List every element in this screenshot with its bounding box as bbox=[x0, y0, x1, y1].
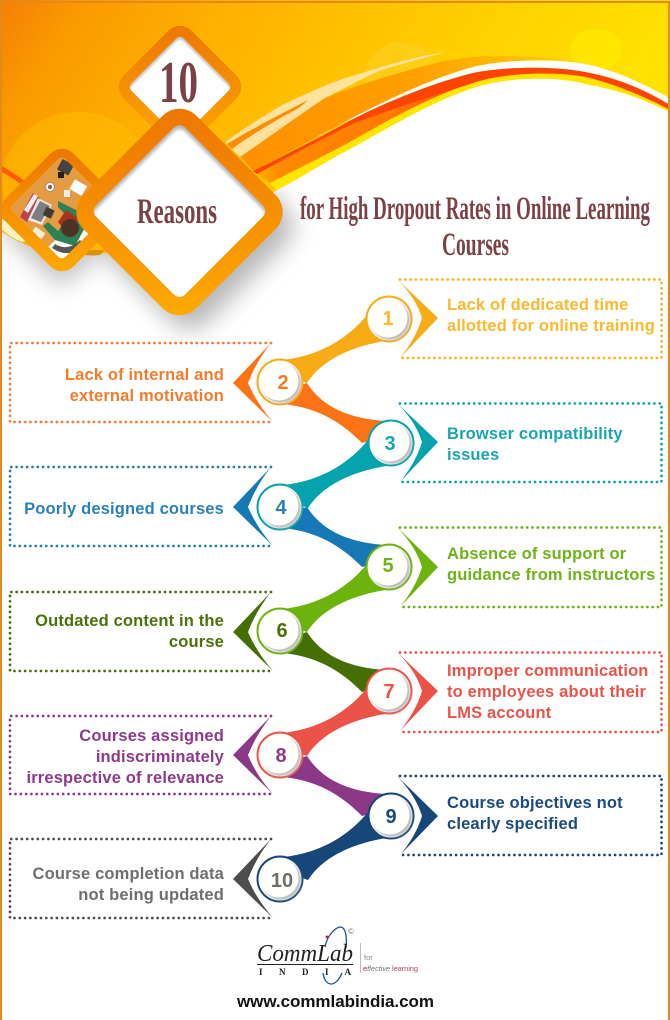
logo: CommLab India: © bbox=[348, 927, 354, 936]
step 8 panel bbox=[10, 716, 273, 794]
number circle 2 bbox=[258, 360, 302, 404]
header background with swoosh bbox=[0, 0, 670, 256]
step 10 panel bbox=[10, 839, 273, 918]
white stripe bbox=[312, 60, 670, 140]
step 3 panel bbox=[397, 403, 662, 482]
number circle 10 bbox=[258, 856, 302, 902]
step 6 panel: course bbox=[169, 633, 224, 651]
yellow strip bbox=[270, 74, 670, 190]
number circle 1: 1 bbox=[382, 308, 394, 330]
number circle 4 bbox=[258, 484, 302, 530]
number circle 3 bbox=[368, 420, 414, 466]
orange band above white stripe bbox=[240, 56, 580, 171]
step 1 panel: Lack of dedicated time bbox=[447, 296, 628, 314]
diamond: desk illustration bbox=[0, 148, 99, 272]
title bbox=[300, 191, 650, 263]
number: 10 bbox=[159, 49, 198, 115]
step 4 panel: Poorly designed courses bbox=[24, 500, 224, 518]
step 2 panel: Lack of internal and bbox=[65, 366, 224, 384]
number circle 2: 2 bbox=[277, 372, 289, 394]
number circle 6: 6 bbox=[276, 620, 288, 642]
number circle 6 bbox=[258, 608, 302, 654]
number circle 7 bbox=[366, 668, 412, 714]
number circle 10: 10 bbox=[271, 870, 293, 892]
step 1 panel: allotted for online training bbox=[447, 317, 655, 335]
step 6 panel: Outdated content in the bbox=[35, 612, 224, 630]
step 7 panel: LMS account bbox=[447, 704, 552, 722]
desk items bbox=[57, 159, 74, 176]
shadow below header diamonds bbox=[0, 113, 303, 339]
step 3 panel: issues bbox=[447, 446, 499, 464]
logo: CommLab India: CommLab bbox=[257, 941, 353, 967]
logo: CommLab India bbox=[257, 927, 418, 984]
step 8 panel: irrespective of relevance bbox=[26, 769, 224, 787]
step 5 panel: guidance from instructors bbox=[447, 566, 655, 584]
step 7 panel bbox=[397, 652, 662, 732]
step 8 panel: Courses assigned bbox=[79, 727, 224, 745]
number circle 8: 8 bbox=[275, 745, 287, 767]
desk surface bbox=[12, 158, 92, 246]
step 7 panel: Improper communication bbox=[447, 662, 649, 680]
orange band under red stripe bbox=[257, 83, 473, 183]
number circle 5: 5 bbox=[382, 555, 394, 577]
step 7 panel: to employees about their bbox=[447, 683, 647, 701]
step 9 panel bbox=[397, 776, 662, 855]
number circle 8 bbox=[258, 732, 302, 778]
connector ribbons between the numbered circles bbox=[278, 315, 393, 880]
step 5 panel bbox=[397, 527, 662, 607]
logo: CommLab India: I N D I A bbox=[259, 967, 352, 977]
pale streak bbox=[225, 52, 445, 157]
title: Courses bbox=[442, 227, 509, 263]
number circle 5 bbox=[366, 544, 412, 590]
step 10 panel: not being updated bbox=[78, 886, 224, 904]
logo: CommLab India: for bbox=[364, 953, 373, 962]
number circle 9 bbox=[368, 794, 414, 838]
number circle 9: 9 bbox=[385, 806, 397, 828]
step 10 panel: Course completion data bbox=[33, 865, 225, 883]
step 8 panel: indiscriminately bbox=[96, 748, 225, 766]
number circle 3: 3 bbox=[384, 433, 396, 455]
number circle 1 bbox=[366, 296, 412, 342]
step 3 panel: Browser compatibility bbox=[447, 425, 623, 443]
diamond: Reasons bbox=[76, 108, 283, 316]
step 2 panel: external motivation bbox=[70, 387, 224, 405]
person arms and body bbox=[43, 201, 88, 246]
step 9 panel: clearly specified bbox=[447, 815, 578, 833]
number circle 4: 4 bbox=[275, 497, 287, 519]
laptop bbox=[20, 193, 40, 222]
step 6 panel bbox=[10, 592, 273, 671]
step 4 panel bbox=[10, 467, 273, 546]
step 1 panel bbox=[397, 279, 662, 358]
red stripe bbox=[253, 68, 670, 174]
website url: www.commlabindia.com bbox=[236, 992, 434, 1011]
step 9 panel: Course objectives not bbox=[447, 794, 623, 812]
step 5 panel: Absence of support or bbox=[447, 545, 627, 563]
diamond: number 10 bbox=[118, 26, 242, 127]
number circle 7: 7 bbox=[383, 681, 395, 703]
logo: CommLab India: effective learning bbox=[363, 964, 418, 973]
step 2 panel bbox=[10, 343, 273, 422]
word: Reasons bbox=[137, 191, 217, 231]
